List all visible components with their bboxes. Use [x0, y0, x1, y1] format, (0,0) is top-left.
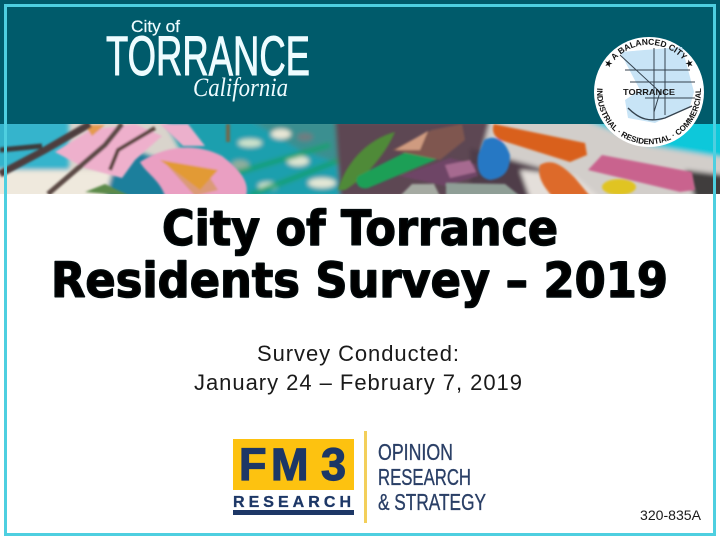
city of Torrance wordmark: TORRANCE [106, 24, 310, 87]
FM3 Research logo: RESEARCH [233, 494, 351, 511]
city of Torrance wordmark: City of [131, 17, 180, 36]
FM3 Research logo: RESEARCH [378, 464, 471, 490]
city seal: ★ A BALANCED CITY ★ [605, 38, 693, 68]
yellow chalk [602, 179, 636, 195]
FM3 Research logo: OPINION [378, 439, 453, 465]
survey dates [194, 341, 522, 395]
branches [0, 124, 90, 174]
city seal: INDUSTRIAL · RESIDENTIAL · COMMERCIAL [597, 88, 701, 144]
pink flowers [55, 124, 162, 178]
FM3 Research logo: FM3 [239, 439, 346, 490]
title: City of Torrance [162, 201, 558, 257]
city seal [594, 37, 704, 147]
city seal: TORRANCE [623, 87, 675, 97]
pink chalk [588, 155, 695, 192]
city of Torrance wordmark [106, 17, 310, 102]
orange chalks [493, 124, 587, 162]
FM3 Research logo: & STRATEGY [378, 489, 486, 515]
job number: 320-835A [640, 508, 701, 523]
FM3 Research logo [233, 431, 486, 523]
survey dates: January 24 – February 7, 2019 [194, 370, 522, 395]
header photo: flowers and chalk [0, 124, 720, 194]
grey chalks [400, 184, 440, 196]
blue chalk [478, 138, 510, 180]
brown chalks [392, 124, 465, 160]
title: Residents Survey – 2019 [51, 253, 668, 309]
green leaf [338, 132, 395, 190]
header band [0, 0, 720, 124]
title [51, 201, 668, 309]
survey dates: Survey Conducted: [257, 341, 459, 366]
green chalk [356, 152, 437, 190]
city of Torrance wordmark: California [193, 73, 288, 102]
